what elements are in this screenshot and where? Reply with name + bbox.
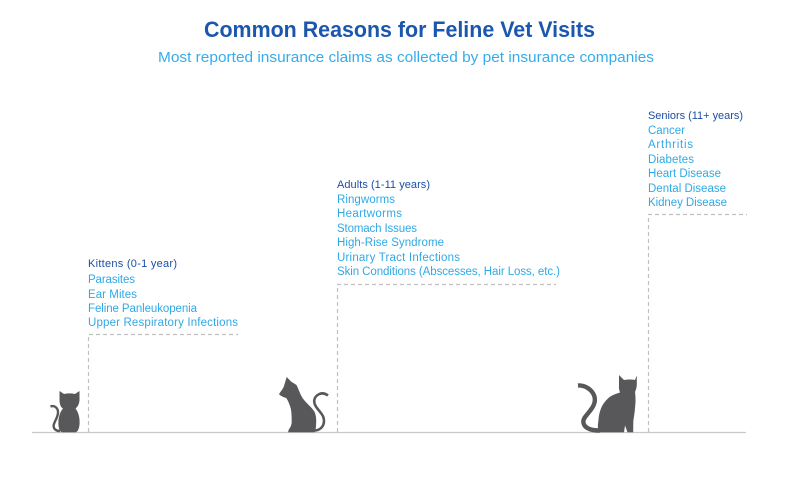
text block: kittens: Ear Mites <box>88 289 137 301</box>
text block: adults: Stomach Issues <box>337 223 417 235</box>
subtitle: Most reported insurance claims as collected by pet insurance companies <box>158 49 654 66</box>
text block: seniors: Diabetes <box>648 154 694 166</box>
text block: kittens: Feline Panleukopenia <box>88 303 198 315</box>
text block: seniors: Seniors (11+ years) <box>648 110 743 122</box>
text block: adults: Ringworms <box>337 194 395 206</box>
text block: adults: Heartworms <box>337 208 402 220</box>
icon: senior cat silhouette <box>578 375 637 432</box>
text block: adults: Urinary Tract Infections <box>337 252 460 264</box>
text block: seniors: Arthritis <box>648 139 693 151</box>
step: adults dashed outline <box>338 284 556 432</box>
text block: kittens: Kittens (0-1 year) <box>88 258 177 270</box>
step: kittens dashed outline <box>88 334 238 432</box>
text block: adults: Skin Conditions (Abscesses, Hair Loss, etc.) <box>337 266 560 278</box>
baseline axis <box>32 432 746 434</box>
text block: kittens <box>88 258 238 329</box>
step: seniors dashed outline <box>648 214 747 432</box>
icon: adult cat silhouette <box>279 377 328 432</box>
title: Common Reasons for Feline Vet Visits <box>204 17 595 42</box>
text block: adults: Adults (1-11 years) <box>337 179 430 191</box>
text block: seniors: Dental Disease <box>648 183 726 195</box>
text block: seniors: Heart Disease <box>648 168 721 180</box>
text block: seniors: Cancer <box>648 125 685 137</box>
text block: seniors <box>648 110 743 209</box>
text block: seniors: Kidney Disease <box>648 197 727 209</box>
text block: adults: High-Rise Syndrome <box>337 237 444 249</box>
text block: kittens: Upper Respiratory Infections <box>88 317 238 329</box>
text block: kittens: Parasites <box>88 274 135 286</box>
text block: adults <box>337 179 560 278</box>
icon: kitten silhouette <box>50 391 80 432</box>
